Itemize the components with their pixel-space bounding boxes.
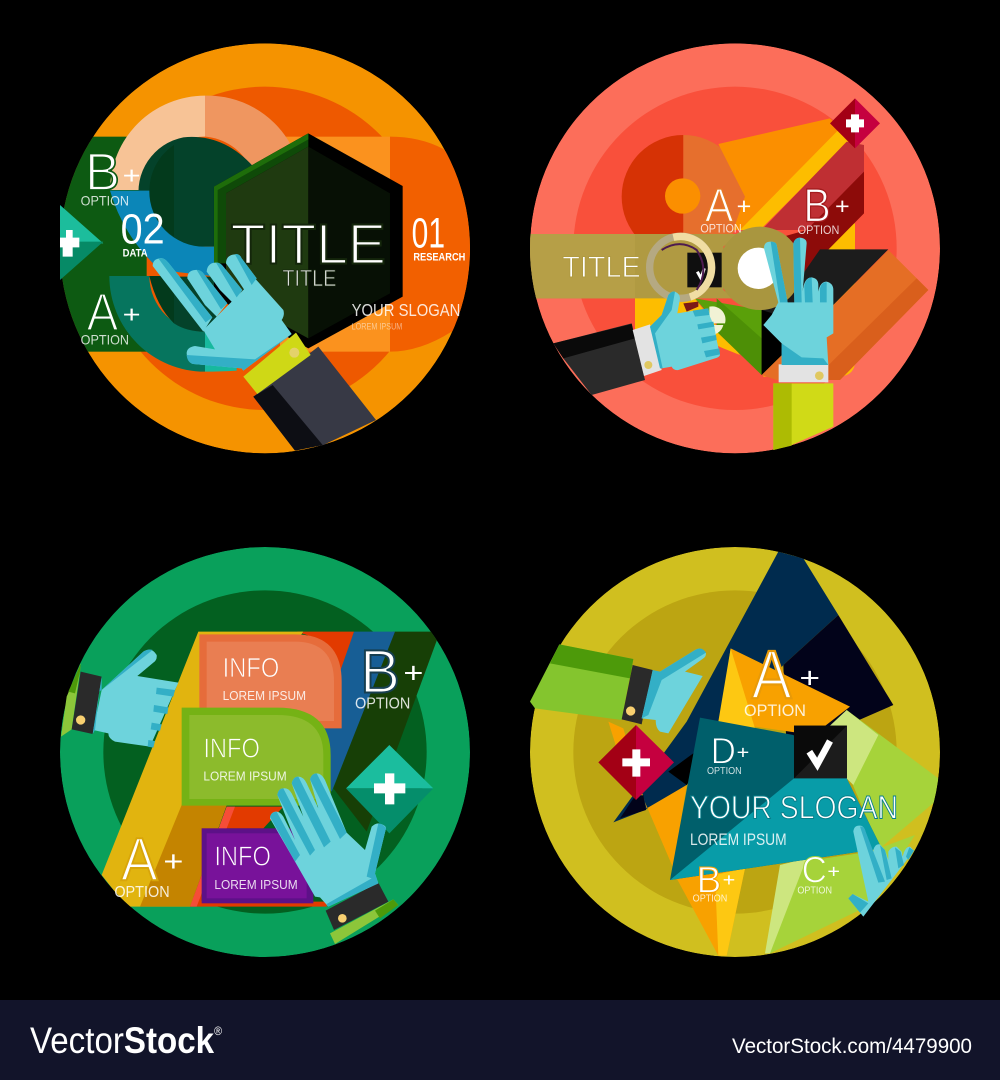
label: 02 data: DATA — [123, 248, 148, 260]
label: B+ option — [81, 143, 141, 208]
icon: peace hand with sleeve — [763, 238, 833, 450]
hexagon title badge: TITLE — [282, 265, 336, 291]
label: A+ option: + — [737, 193, 751, 219]
label: B+ option — [355, 636, 423, 712]
text: image id: VectorStock.com/4479900 — [732, 1035, 972, 1058]
label: A+ option: A — [121, 825, 158, 894]
icon: teal arrow with plus — [60, 205, 103, 280]
label: B+ option: + — [835, 193, 850, 219]
label: A+ option: A — [705, 180, 734, 233]
label: B+ option: OPTION — [693, 894, 727, 905]
label: 01 research: 01 — [412, 209, 445, 257]
footer band — [0, 1000, 1000, 1080]
label: 01 research: RESEARCH — [413, 251, 465, 263]
card: info green: LOREM IPSUM — [203, 768, 287, 783]
label: A+ option: + — [163, 846, 183, 878]
hexagon title badge: TITLE — [231, 213, 386, 276]
label: B+ option: OPTION — [355, 695, 410, 712]
text: title: TITLE — [562, 251, 641, 284]
label: B+ option: B — [85, 143, 120, 202]
icon: diamond with plus — [346, 745, 433, 833]
label: 02 data: 02 — [121, 205, 165, 253]
icon: diamond with plus — [598, 725, 674, 800]
logo: VectorStock: ® — [214, 1024, 222, 1038]
icon: pointing hand with sleeve — [153, 254, 376, 451]
label: B+ option: B — [360, 636, 400, 705]
panel: orange circle with hexagon title — [57, 43, 483, 453]
label: A+ option: OPTION — [114, 884, 170, 901]
card: info purple — [202, 828, 313, 903]
text: your slogan — [352, 300, 460, 331]
label: B+ option: + — [403, 658, 423, 690]
card: info green: INFO — [203, 733, 260, 764]
label: B+ option: + — [723, 869, 735, 890]
icon: left hand with green sleeve — [530, 644, 706, 733]
label: B+ option — [798, 180, 850, 237]
label: A+ option: + — [123, 302, 141, 329]
logo: VectorStock: VectorStock — [30, 1020, 225, 1061]
label: A+ option: A — [87, 283, 119, 342]
label: B+ option: B — [803, 180, 831, 233]
card: info orange — [199, 634, 342, 728]
icon: open hand with sleeve — [270, 773, 398, 944]
label: D+ option: + — [737, 741, 749, 762]
panel: yellow circle with triangles — [530, 547, 940, 957]
text: your slogan — [690, 788, 898, 849]
label: C+ option: OPTION — [797, 885, 832, 896]
label: A+ option — [114, 825, 183, 901]
panel: coral circle with magnifier and title band — [530, 43, 940, 453]
card: info purple: INFO — [214, 841, 271, 872]
label: A+ option — [81, 283, 141, 347]
label: A+ option: + — [799, 663, 820, 695]
icon: check box in magnifier — [687, 253, 722, 287]
text: your slogan: LOREM IPSUM — [690, 830, 787, 849]
icon: check box — [794, 726, 847, 778]
text: your slogan: LOREM IPSUM — [352, 321, 402, 331]
icon: left hand holding magnifier — [553, 291, 720, 395]
label: D+ option: D — [711, 729, 736, 771]
label: A+ option: OPTION — [744, 701, 806, 720]
panel: green circle with info cards — [60, 547, 470, 957]
icon: magnifier — [650, 236, 712, 312]
text: your slogan: YOUR SLOGAN — [352, 300, 460, 320]
label: A+ option: A — [752, 637, 792, 713]
card: info green — [182, 708, 331, 806]
label: A+ option: OPTION — [700, 222, 742, 236]
label: A+ option — [744, 637, 820, 720]
label: B+ option: OPTION — [798, 223, 839, 237]
icon: left pointing hand — [61, 649, 178, 748]
label: A+ option — [700, 180, 751, 236]
card: info orange: LOREM IPSUM — [223, 688, 306, 703]
icon: hand at lower right — [848, 826, 914, 917]
card: info purple: LOREM IPSUM — [214, 877, 298, 892]
label: B+ option — [693, 858, 735, 905]
label: D+ option: OPTION — [707, 766, 742, 777]
label: C+ option: C — [802, 849, 827, 891]
label: C+ option — [797, 849, 840, 896]
label: C+ option: + — [827, 861, 840, 882]
card: info orange: INFO — [223, 652, 279, 683]
label: D+ option — [707, 729, 749, 777]
text: your slogan: YOUR SLOGAN — [690, 788, 898, 825]
label: A+ option: OPTION — [81, 331, 129, 347]
label: B+ option: B — [697, 858, 721, 900]
hexagon title badge — [214, 133, 403, 348]
label: B+ option: OPTION — [81, 192, 129, 208]
icon: diamond with plus — [830, 98, 880, 148]
label: B+ option: + — [123, 162, 141, 189]
